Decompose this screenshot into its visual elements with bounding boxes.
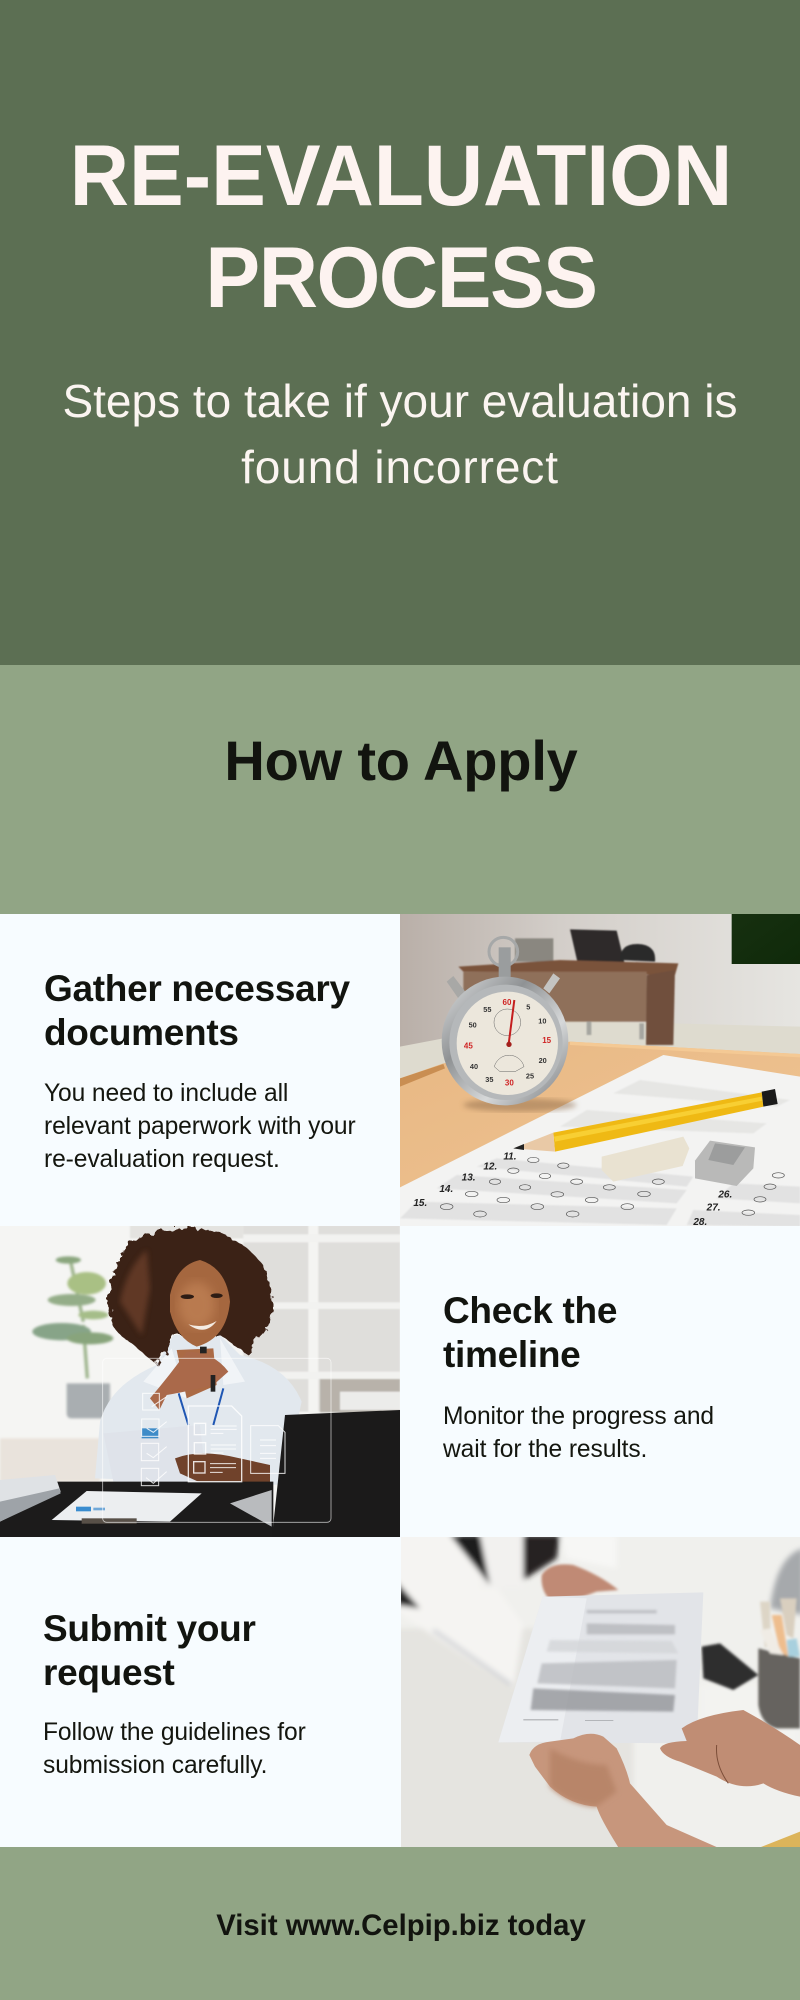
papers bbox=[0, 1475, 61, 1522]
photo: stopwatch and answer sheet: 12. bbox=[483, 1161, 497, 1172]
step 2 body bbox=[443, 1403, 714, 1463]
plant bbox=[32, 1256, 113, 1418]
title bbox=[70, 128, 732, 326]
digital overlay bbox=[103, 1358, 331, 1522]
photo: stopwatch and answer sheet: 55 bbox=[483, 1005, 491, 1014]
step 3 heading: Submit your bbox=[43, 1608, 256, 1649]
panel: step 3 text bbox=[0, 1537, 401, 1847]
subtitle bbox=[62, 375, 738, 493]
photo: woman with checklist overlay bbox=[0, 1226, 400, 1537]
photo: stopwatch and answer sheet: 10 bbox=[538, 1017, 546, 1026]
step 3 body: submission carefully. bbox=[43, 1752, 267, 1779]
photo: stopwatch and answer sheet: 40 bbox=[470, 1062, 478, 1071]
panel: step 2 text bbox=[400, 1226, 800, 1537]
step 3 heading: request bbox=[43, 1652, 175, 1693]
step 1 body: relevant paperwork with your bbox=[44, 1113, 356, 1140]
step 1 heading: Gather necessary bbox=[44, 968, 350, 1009]
shirt bbox=[95, 1335, 302, 1485]
photo: stopwatch and answer sheet: 45 bbox=[464, 1042, 473, 1051]
step 3 heading bbox=[43, 1608, 256, 1693]
photo: stopwatch and answer sheet: 50 bbox=[469, 1020, 477, 1029]
panel: how to apply band bbox=[0, 665, 800, 914]
panel: footer bbox=[0, 1847, 800, 2000]
title: PROCESS bbox=[205, 230, 597, 326]
step 2 heading: timeline bbox=[443, 1334, 580, 1375]
photo: stopwatch and answer sheet: 26. bbox=[717, 1189, 732, 1200]
answer sheet rows bbox=[400, 1080, 800, 1227]
photo: handing over a document bbox=[401, 1537, 800, 1847]
photo: stopwatch and answer sheet: 27. bbox=[706, 1203, 721, 1214]
step 2 body: wait for the results. bbox=[443, 1436, 647, 1463]
desk bbox=[0, 1482, 273, 1540]
lower hands bbox=[529, 1734, 723, 1850]
laptop bbox=[272, 1410, 400, 1540]
face bbox=[170, 1260, 230, 1347]
tablet and arms bbox=[103, 1425, 207, 1483]
hand bbox=[150, 1352, 228, 1410]
photo: stopwatch and answer sheet bbox=[400, 914, 800, 1226]
step 2 heading bbox=[443, 1290, 617, 1375]
title: RE-EVALUATION bbox=[70, 128, 732, 224]
photo: stopwatch and answer sheet: 25 bbox=[526, 1071, 534, 1080]
pencil, eraser, sharpener bbox=[553, 1092, 763, 1152]
step 3 body bbox=[43, 1719, 306, 1779]
step 2 heading: Check the bbox=[443, 1290, 617, 1331]
panel: header bbox=[0, 0, 800, 665]
top hand bbox=[542, 1564, 618, 1605]
photo: stopwatch and answer sheet: 20 bbox=[539, 1056, 547, 1065]
step 2 body: Monitor the progress and bbox=[443, 1403, 714, 1430]
blurred desk objects bbox=[702, 1598, 800, 1728]
stopwatch bbox=[463, 1098, 577, 1112]
panel: step 1 text bbox=[0, 914, 400, 1226]
step 1 body: You need to include all bbox=[44, 1080, 288, 1107]
photo: stopwatch and answer sheet: 14. bbox=[439, 1184, 453, 1195]
step 1 body: re-evaluation request. bbox=[44, 1146, 280, 1173]
step 1 heading: documents bbox=[44, 1012, 239, 1053]
photo: stopwatch and answer sheet: 5 bbox=[526, 1002, 530, 1011]
shelves bbox=[130, 1225, 400, 1412]
subtitle: found incorrect bbox=[241, 441, 559, 493]
document bbox=[498, 1592, 703, 1743]
step 1 body bbox=[44, 1080, 356, 1173]
photo: stopwatch and answer sheet: 30 bbox=[505, 1079, 514, 1088]
footer call to action: Visit www.Celpip.biz today bbox=[216, 1909, 586, 1942]
step 3 body: Follow the guidelines for bbox=[43, 1719, 306, 1746]
photo: stopwatch and answer sheet: 60 bbox=[503, 998, 512, 1007]
photo: stopwatch and answer sheet: 15 bbox=[542, 1036, 552, 1045]
subtitle: Steps to take if your evaluation is bbox=[62, 375, 738, 427]
step 1 heading bbox=[44, 968, 350, 1053]
photo: stopwatch and answer sheet: 13. bbox=[462, 1173, 476, 1184]
hair bbox=[109, 1228, 273, 1365]
photo: stopwatch and answer sheet: 15. bbox=[413, 1198, 427, 1209]
photo: stopwatch and answer sheet: 35 bbox=[485, 1075, 493, 1084]
heading: How to Apply bbox=[224, 729, 578, 792]
photo: stopwatch and answer sheet: 11. bbox=[503, 1151, 517, 1162]
